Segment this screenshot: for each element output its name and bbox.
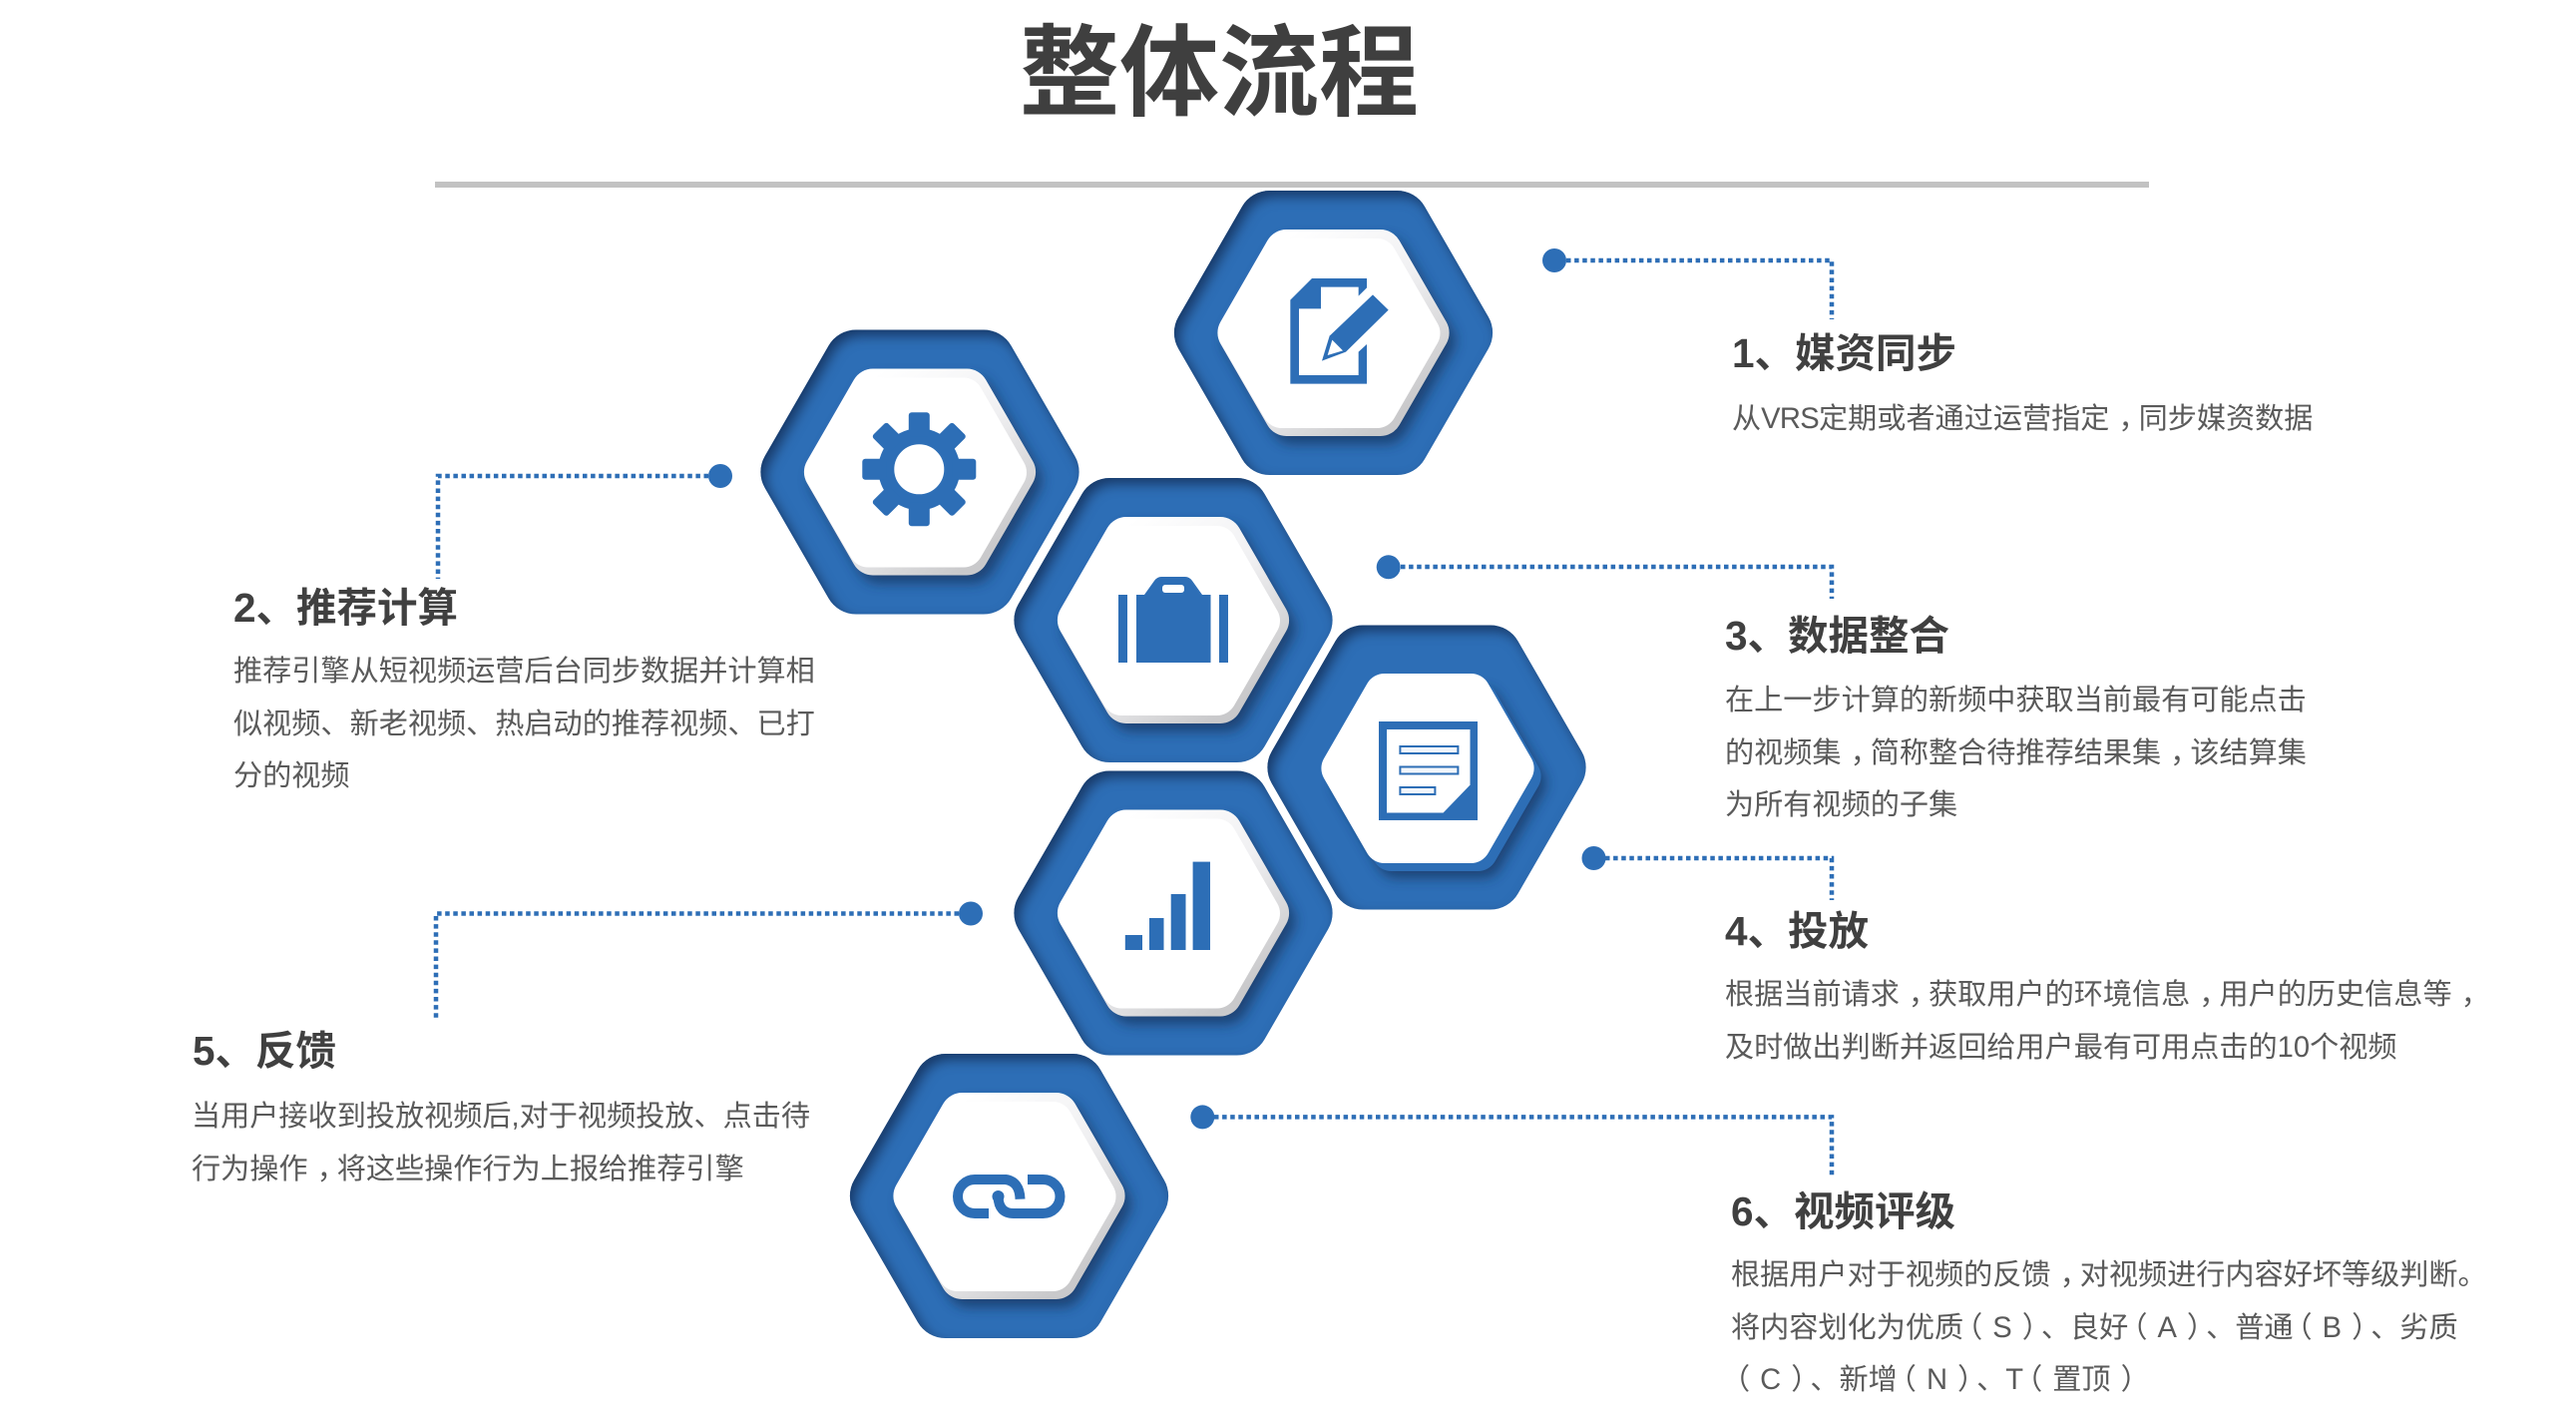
- text: step 3: 为所有视频的子集: [1725, 789, 1957, 821]
- connector 1: [1542, 248, 1832, 319]
- text: step 1: 从VRS定期或者通过运营指定 ，同步媒资数据: [1732, 403, 2313, 435]
- text: step 3: [1725, 685, 2307, 821]
- text: step 2: 似视频、新老视频、热启动的推荐视频、已打: [233, 708, 815, 740]
- text: step 5: [192, 1101, 810, 1185]
- text: step 3: 在上一步计算的新频中获取当前最有可能点击: [1725, 685, 2307, 716]
- icon: suitcase: [1118, 577, 1228, 663]
- hexagon 6: video rating: [882, 1086, 1136, 1306]
- hexagon 1: media sync: [1206, 223, 1461, 443]
- text: step 2: [233, 656, 815, 792]
- divider rule: [435, 182, 2149, 188]
- hexagon 3: data integration: [1046, 510, 1301, 730]
- text: step 6: 将内容划化为优质（ S ）、良好（ A ）、普通（ B ）、劣质: [1731, 1311, 2458, 1343]
- text: step 2: 推荐引擎从短视频运营后台同步数据并计算相: [233, 656, 815, 688]
- icon: note page: [1379, 721, 1478, 820]
- text: step 3: 的视频集 ，简称整合待推荐结果集 ，该结算集: [1725, 736, 2307, 768]
- hexagon 4: delivery: [1299, 657, 1554, 878]
- icon: signal bars: [1125, 862, 1210, 950]
- heading: step 2: 2、推荐计算: [233, 585, 458, 631]
- text: step 4: [1725, 979, 2490, 1064]
- text: step 4: 根据当前请求 ，获取用户的环境信息 ，用户的历史信息等 ，: [1725, 979, 2490, 1011]
- text: step 4: 及时做出判断并返回给用户最有可用点击的10个视频: [1725, 1032, 2397, 1064]
- title: 整体流程: [1020, 18, 1419, 130]
- text: step 6: （ C ）、新增（ N ）、T（ 置顶 ）: [1721, 1364, 2150, 1396]
- heading: step 5: 5、反馈: [193, 1028, 336, 1074]
- icon: document with pencil: [1290, 278, 1389, 384]
- text: step 5: 当用户接收到投放视频后,对于视频投放、点击待: [192, 1101, 810, 1133]
- heading: step 1: 1、媒资同步: [1732, 330, 1956, 376]
- text: step 2: 分的视频: [233, 760, 350, 792]
- connector 3: [1377, 555, 1832, 599]
- hexagon 2: recommendation: [792, 361, 1048, 583]
- text: step 6: 根据用户对于视频的反馈 ，对视频进行内容好坏等级判断。: [1731, 1259, 2487, 1291]
- connector 5: [436, 902, 983, 1019]
- text: step 5: 行为操作 ，将这些操作行为上报给推荐引擎: [192, 1154, 744, 1185]
- hexagon 5: feedback: [1046, 802, 1301, 1024]
- heading: step 3: 3、数据整合: [1725, 613, 1949, 659]
- connector 4: [1582, 846, 1832, 900]
- heading: step 4: 4、投放: [1725, 908, 1869, 954]
- icon: gear: [862, 412, 976, 526]
- icon: chain link: [958, 1180, 1060, 1213]
- heading: step 6: 6、视频评级: [1731, 1188, 1955, 1234]
- connector 2: [438, 464, 732, 579]
- connector 6: [1190, 1105, 1832, 1177]
- text: step 6: [1721, 1259, 2487, 1396]
